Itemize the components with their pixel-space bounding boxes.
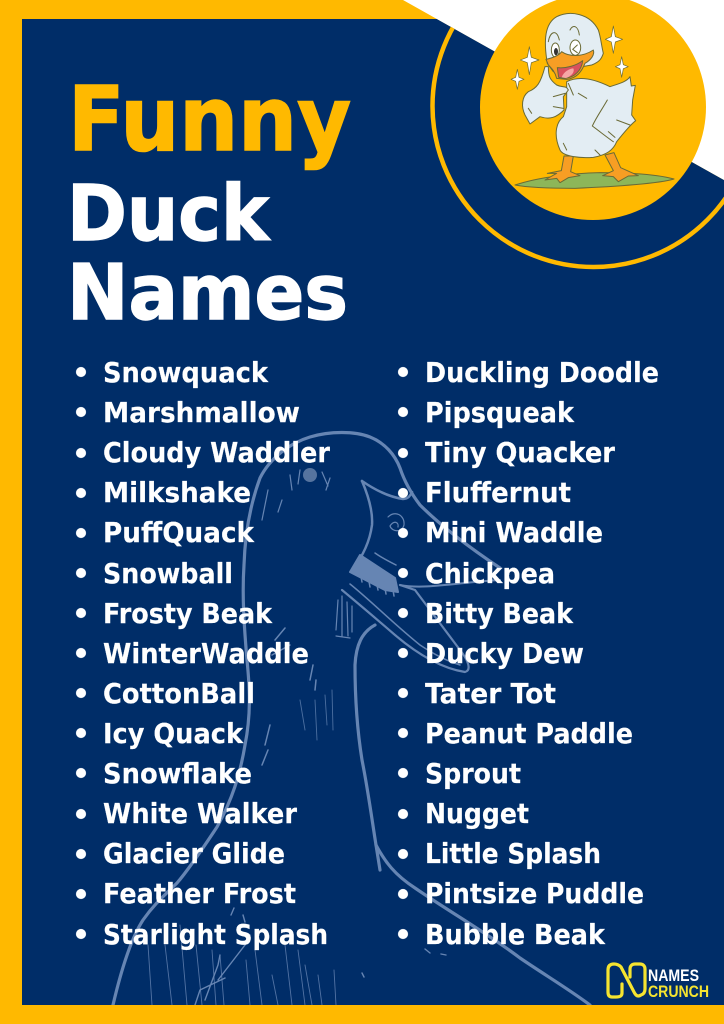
name: Mini Waddle: Mini Waddle: [425, 517, 603, 549]
name: White Walker: White Walker: [103, 798, 297, 830]
name: Snowball: Snowball: [103, 558, 233, 590]
icon: N logo mark: [608, 964, 645, 997]
name: Peanut Paddle: Peanut Paddle: [425, 718, 633, 750]
watermark: duck line drawing: [113, 432, 590, 1005]
name: Fluffernut: Fluffernut: [425, 477, 571, 509]
name: Frosty Beak: Frosty Beak: [103, 598, 273, 630]
name: Feather Frost: Feather Frost: [103, 878, 296, 910]
title line: Funny: Funny: [68, 67, 351, 171]
yellow circle badge: [480, 0, 706, 220]
name: Ducky Dew: Ducky Dew: [425, 638, 584, 670]
name: Snowflake: Snowflake: [103, 758, 252, 790]
name: Starlight Splash: Starlight Splash: [103, 919, 328, 951]
name: Sprout: Sprout: [425, 758, 521, 790]
name: PuffQuack: PuffQuack: [103, 517, 255, 549]
name: Cloudy Waddler: Cloudy Waddler: [103, 437, 330, 469]
name: Tiny Quacker: Tiny Quacker: [425, 437, 615, 469]
list: right column of names: [398, 357, 659, 951]
name: Nugget: Nugget: [425, 798, 529, 830]
name: Milkshake: Milkshake: [103, 477, 251, 509]
logo text: NAMES: NAMES: [648, 966, 699, 985]
list: left column of names: [76, 357, 330, 951]
name: Snowquack: Snowquack: [103, 357, 269, 389]
logo: Names Crunch: [608, 964, 709, 1001]
title line: Duck: Duck: [67, 170, 271, 259]
title line: Names: Names: [67, 249, 348, 338]
white corner triangle: [403, 0, 724, 180]
name: Icy Quack: Icy Quack: [103, 718, 244, 750]
name: Little Splash: Little Splash: [425, 838, 601, 870]
name: CottonBall: CottonBall: [103, 678, 255, 710]
icon: cartoon duck: [511, 13, 674, 188]
name: Pipsqueak: Pipsqueak: [425, 397, 575, 429]
decorative ring arc: [432, 0, 724, 267]
name: Marshmallow: Marshmallow: [103, 397, 300, 429]
logo text: CRUNCH: CRUNCH: [648, 982, 709, 1001]
name: WinterWaddle: WinterWaddle: [103, 638, 309, 670]
name: Tater Tot: Tater Tot: [425, 678, 556, 710]
title: [67, 67, 351, 338]
name: Bitty Beak: Bitty Beak: [425, 598, 574, 630]
name: Duckling Doodle: Duckling Doodle: [425, 357, 659, 389]
name: Chickpea: Chickpea: [425, 558, 555, 590]
name: Pintsize Puddle: Pintsize Puddle: [425, 878, 644, 910]
name: Glacier Glide: Glacier Glide: [103, 838, 285, 870]
name: Bubble Beak: Bubble Beak: [425, 919, 606, 951]
